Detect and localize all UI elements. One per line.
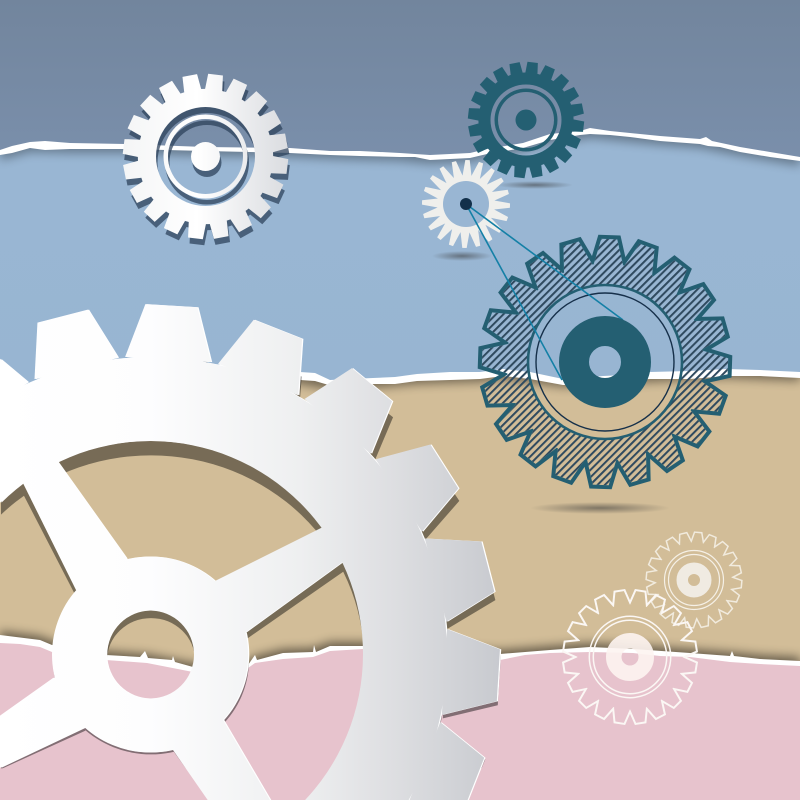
shadow: small gear on blue	[497, 181, 573, 189]
panel: slate grey torn paper	[0, 0, 800, 166]
icon: large white outline gear	[562, 589, 698, 725]
icon: small white outline gear	[645, 531, 743, 629]
panel: pink torn paper	[0, 631, 800, 800]
icon: hatched gear hub	[574, 331, 636, 393]
icon: connector pivot dot	[460, 198, 472, 210]
arrow: connector lines from spiky gear to hatched gear	[466, 204, 623, 380]
icon: hatched outline gear	[478, 234, 732, 490]
shadow: hatched gear on tan	[530, 502, 670, 514]
icon: white paper gear, top left	[122, 74, 290, 246]
icon: dark teal gear, top centre	[468, 62, 584, 178]
panel: blue torn paper	[0, 0, 800, 409]
icon: pale spiky gear	[422, 160, 510, 248]
icon: large white paper gear	[0, 304, 502, 800]
shadow: spiky gear on blue	[432, 251, 492, 261]
